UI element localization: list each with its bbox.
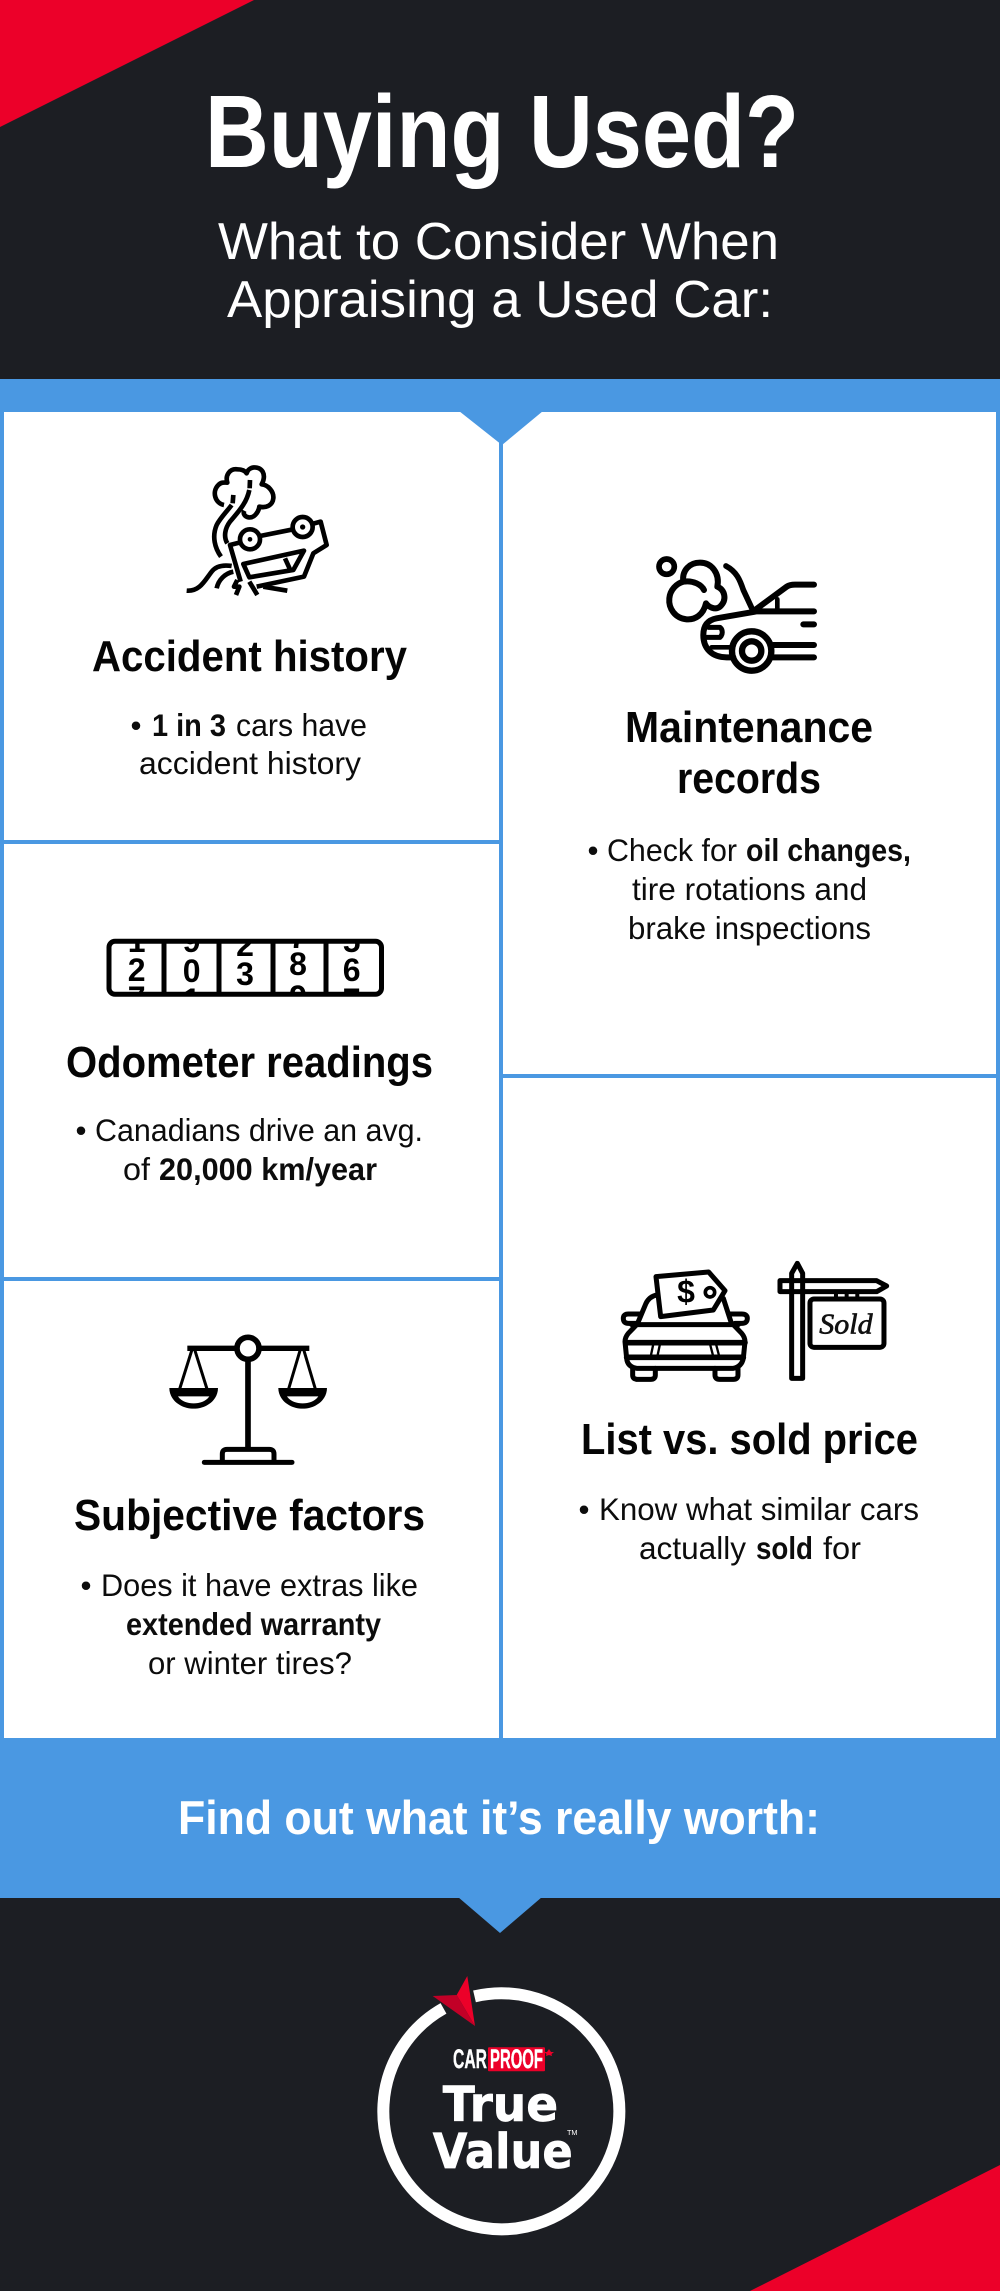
icon: odometer: 1 (183, 982, 201, 1018)
icon: odometer: 7 (289, 919, 307, 955)
icon: odometer: 6 (343, 952, 361, 988)
text: average distance: of (123, 1151, 150, 1187)
subtitle (218, 213, 779, 329)
panel: subjective factors (4, 1281, 499, 1738)
icon: odometer: 8 (289, 946, 307, 982)
text: average distance: Canadians drive an avg. (95, 1112, 423, 1148)
text: maintenance checks: Check for (607, 832, 737, 868)
text: maintenance checks: • (587, 832, 599, 868)
text: similar cars: for (823, 1530, 861, 1566)
icon: odometer (106, 938, 384, 997)
icon: odometer: 9 (289, 979, 307, 1015)
text: maintenance checks (587, 832, 911, 946)
text: extras: Does it have extras like (101, 1567, 418, 1603)
icon: odometer: 7 (128, 980, 146, 1016)
heading: Maintenance (625, 703, 873, 752)
red corner triangle top left (0, 0, 254, 127)
icon: odometer: 2 (128, 952, 146, 988)
text: accident stat: accident history (139, 745, 361, 781)
icon: odometer: 5 (343, 923, 361, 959)
icon: odometer: 9 (183, 923, 201, 959)
panel: odometer readings (4, 844, 499, 1277)
icon: crashed car and tree (187, 467, 327, 595)
icon: car with open hood and smoke (659, 559, 814, 671)
True Value wordmark: Value (433, 2124, 573, 2180)
logo arrow (433, 1976, 475, 2026)
red corner triangle bottom right (750, 2165, 1000, 2291)
call to action: Find out what it’s really worth: (178, 1791, 820, 1844)
title: Buying Used? (205, 74, 799, 189)
icon: odometer: 3 (236, 956, 254, 992)
heading: Odometer readings (66, 1038, 433, 1087)
panel: list vs sold price (503, 1078, 996, 1738)
icon: car with price tag and sold sign: $ (677, 1274, 695, 1310)
arrow: top notch (459, 411, 543, 445)
icon: car with price tag and sold sign (623, 1263, 887, 1379)
heading: Subjective factors (74, 1491, 425, 1540)
CarProof wordmark (453, 2044, 554, 2074)
icon: balance scale (169, 1337, 327, 1462)
blue background band (0, 379, 1000, 1898)
icon: odometer: 2 (236, 927, 254, 963)
text: average distance: 20,000 km/year (159, 1151, 377, 1187)
CarProof wordmark: CAR (453, 2044, 487, 2074)
text: average distance (75, 1112, 423, 1187)
text: extras: • (80, 1567, 92, 1603)
text: average distance: • (75, 1112, 87, 1148)
text: extras: or winter tires? (148, 1645, 352, 1681)
text: accident stat (130, 707, 367, 781)
heading: records (677, 754, 821, 803)
text: extras (80, 1567, 418, 1681)
text: similar cars: Know what similar cars (599, 1491, 919, 1527)
True Value wordmark (433, 2077, 578, 2180)
panel: accident history (4, 412, 499, 840)
text: maintenance checks: brake inspections (628, 910, 871, 946)
text: accident stat: 1 in 3 (152, 707, 226, 743)
icon: car with price tag and sold sign: Sold (819, 1309, 874, 1340)
text: similar cars: actually (639, 1530, 746, 1566)
panel: maintenance records (503, 412, 996, 1074)
heading: Accident history (92, 632, 407, 681)
logo: CarProof True Value (383, 1976, 619, 2229)
text: similar cars: • (578, 1491, 590, 1527)
subtitle: What to Consider When (218, 213, 779, 271)
text: maintenance checks: tire rotations and (632, 871, 867, 907)
text: similar cars: sold (756, 1530, 813, 1566)
header (0, 0, 799, 329)
True Value wordmark: TM (567, 2128, 578, 2137)
logo ring (383, 1993, 619, 2229)
icon: odometer: 7 (343, 982, 361, 1018)
text: extras: extended warranty (126, 1606, 381, 1642)
text: accident stat: cars have (236, 707, 367, 743)
icon: odometer: 0 (183, 953, 201, 989)
True Value wordmark: True (443, 2077, 558, 2133)
text: similar cars (578, 1491, 919, 1566)
text: maintenance checks: oil changes, (746, 832, 911, 868)
arrow: bottom notch (458, 1897, 542, 1933)
heading (625, 703, 873, 803)
text: accident stat: • (130, 707, 142, 743)
icon: odometer: 1 (128, 923, 146, 959)
subtitle: Appraising a Used Car: (227, 271, 773, 329)
heading: List vs. sold price (581, 1415, 918, 1464)
CarProof wordmark: PROOF (490, 2044, 543, 2074)
